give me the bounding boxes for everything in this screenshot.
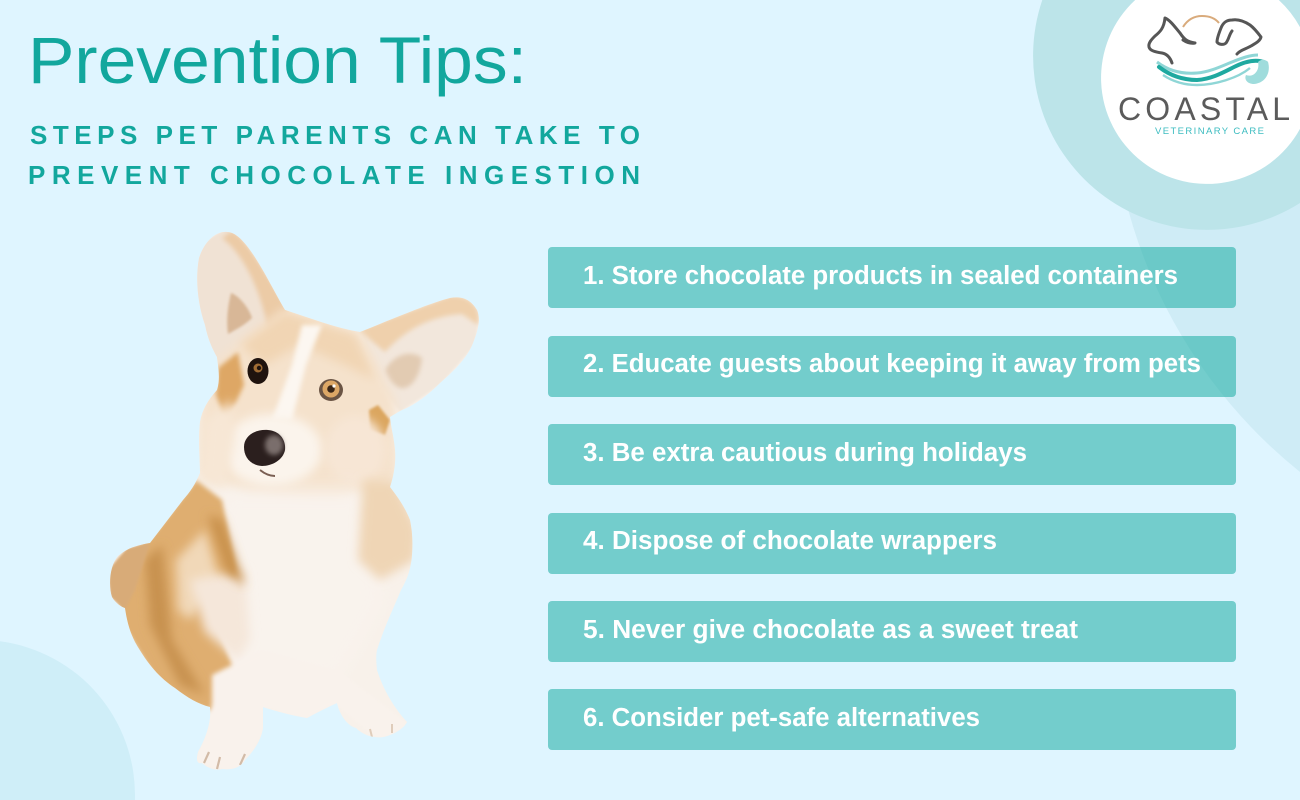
tip 5: 5. Never give chocolate as a sweet treat (583, 616, 1079, 644)
logo wordmark: COASTAL (1118, 91, 1290, 127)
right ear rim (358, 296, 479, 352)
head top peach (240, 312, 375, 380)
corgi illustration (100, 225, 490, 775)
tip 2: 2. Educate guests about keeping it away from pets (583, 350, 1201, 378)
right cheek orange (369, 405, 390, 435)
left eye (248, 358, 268, 384)
decorative circle: lower right (1110, 0, 1300, 472)
decorative circle: bottom left (0, 641, 135, 800)
head fur (200, 308, 397, 505)
tip 6 (548, 689, 1236, 750)
icon: dog outline (1217, 20, 1261, 54)
subtitle (28, 120, 640, 190)
flank dark band (145, 545, 205, 695)
tip 4: 4. Dispose of chocolate wrappers (583, 527, 997, 555)
left ear (197, 232, 266, 364)
left body orange (120, 480, 240, 712)
tip 1 (548, 247, 1236, 308)
tip 4 (548, 513, 1236, 574)
tip 3: 3. Be extra cautious during holidays (583, 439, 1027, 467)
icon: teal wave (1159, 61, 1266, 80)
title: Prevention Tips: (28, 23, 527, 97)
lower belly and legs white (208, 662, 238, 714)
right cheek light (332, 414, 386, 477)
tail (108, 543, 150, 610)
tip 1: 1. Store chocolate products in sealed containers (583, 262, 1178, 290)
right eye (319, 379, 343, 401)
white badge circle (1101, 0, 1300, 184)
tip 6: 6. Consider pet-safe alternatives (583, 704, 980, 732)
icon: cat outline (1149, 18, 1195, 63)
icon: shell (1245, 60, 1269, 84)
left ear rim (222, 231, 290, 330)
toes left paw (204, 752, 245, 769)
icon: upper light wave (1157, 55, 1258, 73)
dog base coat (100, 225, 490, 775)
left ear patch (227, 293, 252, 334)
right ear (366, 310, 478, 410)
icon: sun arc (1183, 16, 1219, 27)
subtitle line 2: PREVENT CHOCOLATE INGESTION (28, 160, 640, 190)
subtitle line 1: STEPS PET PARENTS CAN TAKE TO (30, 120, 640, 150)
right ear patch (385, 354, 422, 388)
logo tagline: VETERINARY CARE (1155, 126, 1264, 137)
tip 2 (548, 336, 1236, 397)
shoulder orange streak (208, 515, 245, 585)
left cheek orange (216, 352, 244, 416)
tip 5 (548, 601, 1236, 662)
muzzle (222, 414, 322, 486)
tip list (548, 247, 1236, 750)
left side cream cheek (209, 397, 236, 484)
flank light band (176, 530, 222, 620)
tip 3 (548, 424, 1236, 485)
logo badge (1101, 0, 1300, 184)
right shoulder cream (358, 480, 418, 580)
pale chest side (190, 570, 250, 660)
icon: lower light wave (1163, 68, 1250, 85)
decorative circle: behind logo (1033, 0, 1300, 230)
head blaze (272, 325, 322, 420)
nose (244, 430, 285, 476)
neck and chest white (236, 484, 359, 509)
toes right paw (370, 724, 392, 737)
